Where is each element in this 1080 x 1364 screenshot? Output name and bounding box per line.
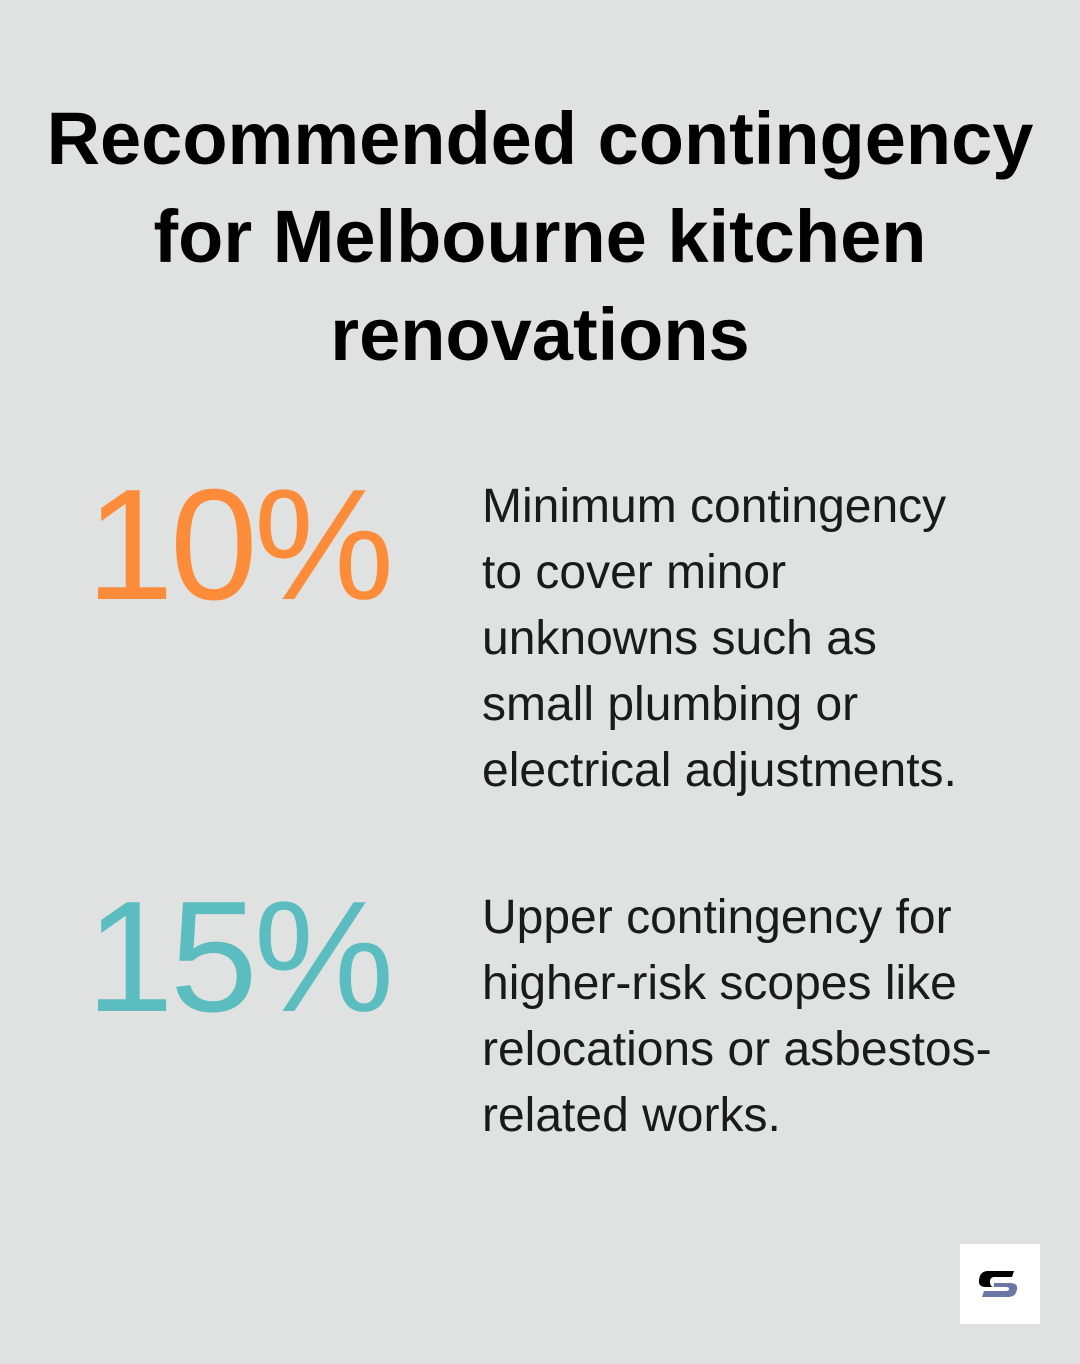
text: 10% description: electrical adjustments. <box>482 744 957 797</box>
title: for Melbourne kitchen <box>154 195 926 278</box>
logo <box>960 1244 1040 1324</box>
text: 10% description: to cover minor <box>482 546 786 599</box>
text: 15% description: related works. <box>482 1089 781 1142</box>
text: 15% description <box>482 891 992 1142</box>
text: 15% description: higher-risk scopes like <box>482 957 957 1010</box>
text: 10% description: Minimum contingency <box>482 480 946 533</box>
text: 10% description: unknowns such as <box>482 612 877 665</box>
title: renovations <box>330 293 750 376</box>
text: 15% description: relocations or asbestos- <box>482 1023 992 1076</box>
stat: 10%: 10% <box>86 457 390 633</box>
title: Recommended contingency <box>47 97 1033 180</box>
title <box>47 97 1033 376</box>
text: 15% description: Upper contingency for <box>482 891 952 944</box>
text: 10% description: small plumbing or <box>482 678 858 731</box>
stat: 15%: 15% <box>86 869 390 1045</box>
text: 10% description <box>482 480 957 797</box>
